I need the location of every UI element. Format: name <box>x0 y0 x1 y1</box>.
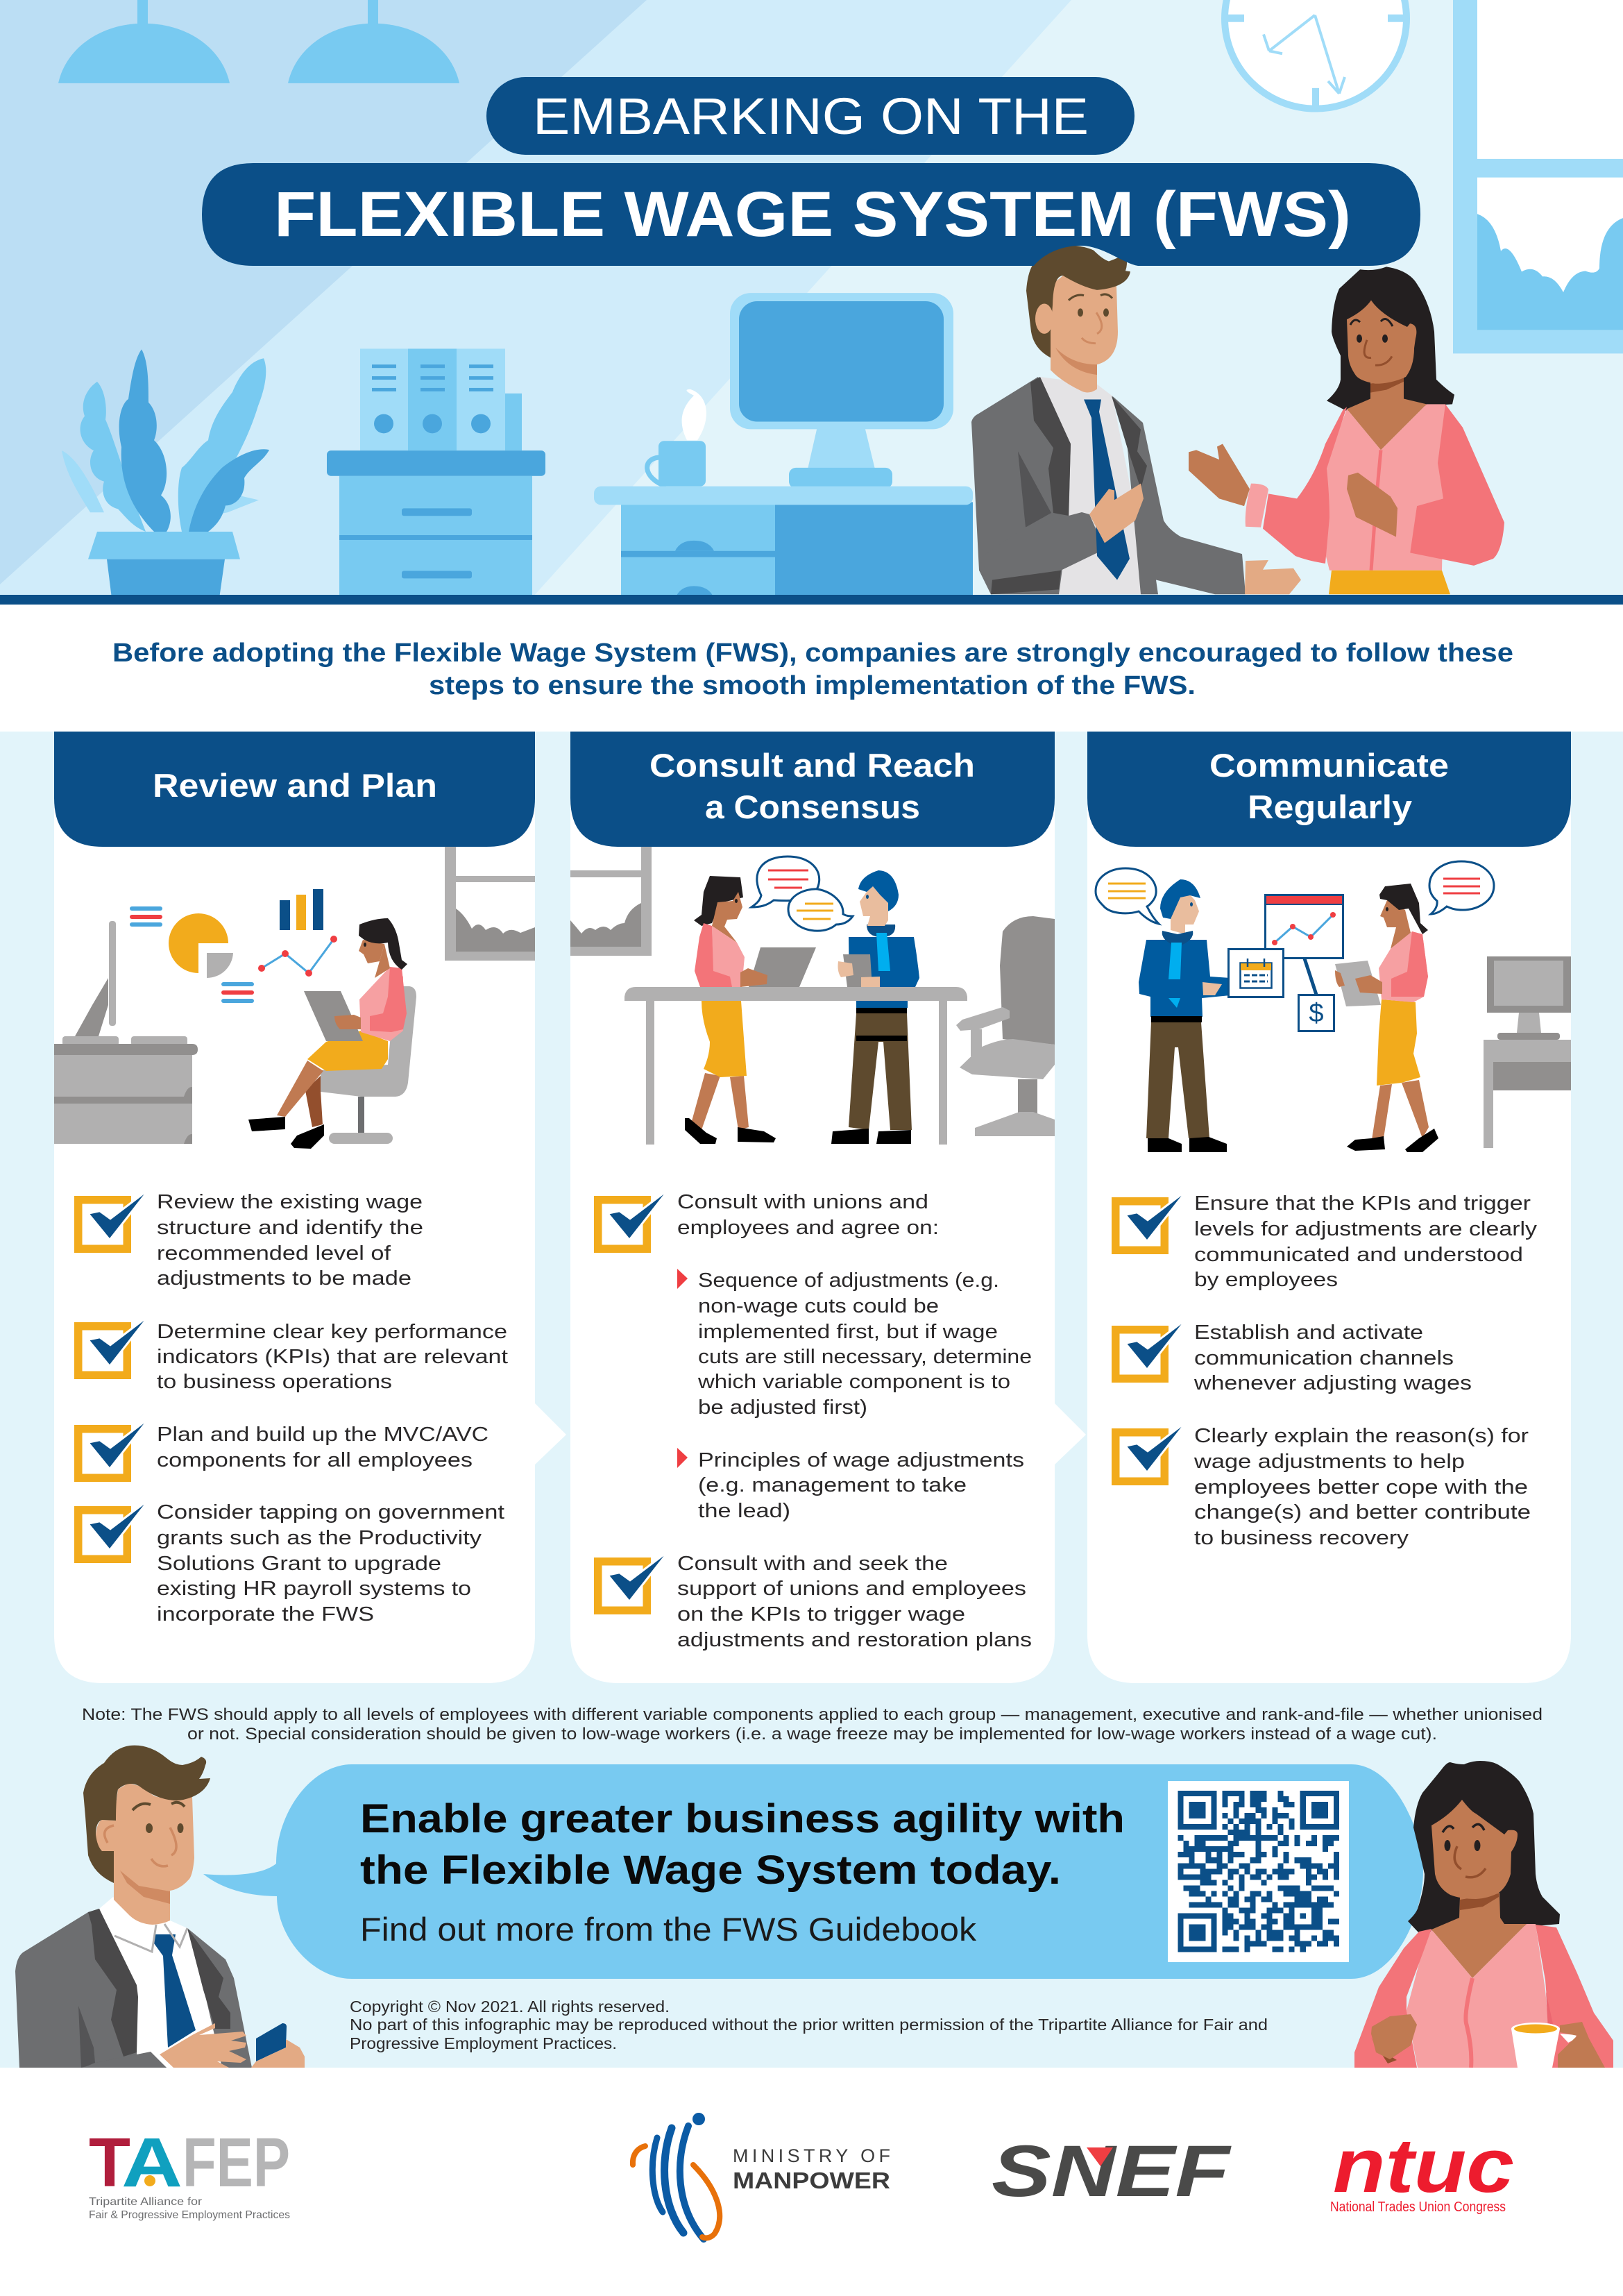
blouse <box>1354 1924 1613 2068</box>
checklist item <box>74 1501 504 1626</box>
jacket <box>15 1909 252 2068</box>
title: flexible wage system <box>202 163 1420 266</box>
checklist item: communication channels <box>1194 1347 1454 1369</box>
panel header: a Consensus <box>705 788 920 825</box>
data icons <box>130 889 337 1003</box>
man with tablet <box>831 870 919 1144</box>
blouse <box>1246 404 1504 571</box>
hands <box>1089 484 1301 594</box>
office chair <box>956 916 1055 1136</box>
tie <box>154 1934 196 2048</box>
woman with tablet <box>1335 884 1438 1152</box>
checklist item: Plan and build up the MVC/AVC <box>157 1424 488 1446</box>
note text: or not. Special consideration should be given to low-wage workers (i.e. a wage freeze may be implemented for low-wage workers instead of a wage cut). <box>187 1725 1437 1744</box>
intro text <box>112 639 1513 700</box>
speech bubbles <box>1096 861 1494 924</box>
logo: SNEF: SNEF <box>992 2131 1232 2212</box>
logo: Ministry of Manpower <box>633 2113 890 2239</box>
call to action text <box>360 1796 1125 1948</box>
checklist item: grants such as the Productivity <box>157 1527 482 1549</box>
logo: TAFEP: A <box>121 2124 182 2202</box>
call to action speech bubble <box>203 1764 1423 1979</box>
logo: Ministry of Manpower: MANPOWER <box>733 2168 890 2193</box>
checklist item: Clearly explain the reason(s) for <box>1194 1425 1529 1447</box>
sleeve and hand <box>83 2052 167 2068</box>
sub-point: sequence of adjustments: implemented first, but if wage <box>698 1321 998 1343</box>
sub-point: principles of wage adjustments: the lead) <box>698 1500 790 1522</box>
title: embarking on the <box>486 77 1135 155</box>
face <box>1431 1800 1518 1899</box>
speech bubble lines <box>768 870 833 919</box>
checklist item <box>1112 1425 1531 1549</box>
sub-point: principles of wage adjustments <box>677 1448 1024 1522</box>
checklist item: employees better cope with the <box>1194 1476 1528 1499</box>
checklist item <box>74 1191 423 1290</box>
seated woman <box>248 918 416 1149</box>
speech bubbles <box>751 856 853 931</box>
logo: NTUC: ntuc <box>1333 2123 1514 2209</box>
potted plant <box>62 349 269 598</box>
note text <box>82 1705 1543 1744</box>
ceiling lamps <box>58 0 459 83</box>
sub-point: sequence of adjustments: which variable component is to <box>697 1371 1010 1393</box>
checklist item: wage adjustments to help <box>1193 1451 1465 1473</box>
illustration: woman reviewing data <box>54 847 535 1149</box>
jacket <box>971 377 1246 594</box>
checklist item: adjustments to be made <box>157 1267 411 1290</box>
checklist item: adjustments and restoration plans <box>677 1629 1032 1651</box>
logo: Ministry of Manpower: MINISTRY OF <box>733 2145 890 2166</box>
panel header <box>570 732 1055 847</box>
hand holding phone <box>251 2039 305 2068</box>
businesswoman <box>1189 267 1504 594</box>
checklist item: levels for adjustments are clearly <box>1194 1218 1538 1240</box>
businessman <box>971 245 1301 594</box>
logo: NTUC: National Trades Union Congress <box>1330 2200 1506 2215</box>
checklist item <box>74 1321 508 1393</box>
face and neck <box>1347 301 1427 450</box>
panel header: Review and Plan <box>153 767 437 804</box>
wall clock <box>1225 0 1407 109</box>
monitor and desk <box>1484 956 1571 1148</box>
hands <box>1189 444 1397 537</box>
sub-point: sequence of adjustments: Sequence of adjustments (e.g. <box>698 1269 999 1292</box>
speech bubble lines <box>1108 879 1480 898</box>
right hand <box>1558 2022 1605 2068</box>
checklist item <box>594 1553 1032 1651</box>
checklist item: by employees <box>1194 1269 1338 1291</box>
logo: TAFEP: T <box>89 2124 130 2202</box>
call to action text: the Flexible Wage System today. <box>360 1848 1061 1893</box>
coffee mug <box>647 389 706 487</box>
logo: TAFEP: Tripartite Alliance for <box>89 2196 203 2208</box>
window <box>1453 0 1623 353</box>
checklist item: Solutions Grant to upgrade <box>157 1553 441 1575</box>
sub-point: sequence of adjustments <box>677 1269 1032 1419</box>
arrow to next panel <box>1055 1403 1086 1464</box>
checklist item: on the KPIs to trigger wage <box>677 1603 965 1626</box>
calendar card <box>1228 949 1284 997</box>
QR code <box>1168 1781 1349 1962</box>
desk <box>594 487 973 598</box>
call to action text: Enable greater business agility with <box>360 1796 1125 1841</box>
title: embarking on the: EMBARKING ON THE <box>533 87 1089 145</box>
checklist item: existing HR payroll systems to <box>157 1578 471 1600</box>
checklist item: indicators (KPIs) that are relevant <box>157 1346 508 1368</box>
checklist item: to business operations <box>157 1371 392 1393</box>
coffee cup <box>1511 2023 1577 2068</box>
binders and filing cabinet <box>327 348 545 598</box>
checklist item: support of unions and employees <box>677 1578 1026 1600</box>
checklist item <box>74 1424 488 1482</box>
panel: consult and reach a consensus <box>570 732 1086 1683</box>
window <box>445 847 535 961</box>
copyright text: Progressive Employment Practices. <box>350 2034 617 2052</box>
checklist item: Consult with unions and <box>677 1191 928 1213</box>
copyright text <box>350 1998 1268 2052</box>
checklist item: Review the existing wage <box>157 1191 423 1213</box>
window <box>570 847 652 956</box>
checklist item: Establish and activate <box>1194 1322 1423 1344</box>
checklist item <box>594 1191 939 1253</box>
standing table <box>624 987 967 1145</box>
checklist item <box>1112 1322 1472 1394</box>
checklist item: Determine clear key performance <box>157 1321 507 1343</box>
call to action text: Find out more from the FWS Guidebook <box>360 1911 977 1948</box>
logo: TAFEP: Fair & Progressive Employment Practices <box>89 2209 290 2221</box>
checklist item: components for all employees <box>157 1449 473 1471</box>
arrow to next panel <box>535 1403 566 1464</box>
tie <box>1084 399 1130 580</box>
note text: Note: The FWS should apply to all levels of employees with different variable components applied to each group — management, executive and rank-and-file — whether unionised <box>82 1705 1543 1724</box>
panel: communicate regularly <box>1087 732 1571 1683</box>
hero scene <box>0 0 1623 605</box>
sub-point: principles of wage adjustments: (e.g. management to take <box>698 1474 967 1496</box>
light section background <box>0 732 1623 2068</box>
smartphone <box>256 2023 287 2061</box>
hair <box>1327 267 1454 411</box>
neck and face <box>1026 245 1130 393</box>
illustration: consultation at table <box>570 847 1055 1145</box>
checklist item: Ensure that the KPIs and trigger <box>1194 1192 1531 1215</box>
panel header: Communicate <box>1209 747 1449 784</box>
checklist item: to business recovery <box>1194 1527 1409 1549</box>
head <box>83 1746 210 1925</box>
man with phone <box>15 1746 305 2068</box>
neck <box>1431 1893 1527 1978</box>
checklist item: recommended level of <box>157 1242 391 1265</box>
copyright text: Copyright © Nov 2021. All rights reserved. <box>350 1998 670 2016</box>
panel header <box>54 732 535 847</box>
checklist item: incorporate the FWS <box>157 1603 374 1626</box>
panel header: Regularly <box>1248 788 1412 825</box>
checklist item: Consult with and seek the <box>677 1553 948 1575</box>
logo: TAFEP: FEP <box>182 2124 290 2202</box>
kpi chart card <box>1266 895 1343 995</box>
skirt <box>1329 571 1450 594</box>
hero floor band <box>0 595 1623 605</box>
panel: review and plan <box>54 732 566 1683</box>
sub-point: sequence of adjustments: be adjusted first) <box>698 1396 867 1419</box>
checklist item: whenever adjusting wages <box>1193 1372 1472 1394</box>
sub-point: principles of wage adjustments: Principles of wage adjustments <box>698 1449 1024 1471</box>
checklist item: change(s) and better contribute <box>1194 1501 1531 1523</box>
hair <box>1408 1761 1560 1933</box>
swoosh emblem <box>633 2113 720 2239</box>
dollar card: $ <box>1309 999 1324 1028</box>
copyright text: No part of this infographic may be reproduced without the prior written permission of the Tripartite Alliance for Fair and <box>350 2016 1268 2034</box>
man gesturing <box>1139 879 1230 1152</box>
panel header: Consult and Reach <box>649 747 975 784</box>
woman with laptop <box>685 876 816 1144</box>
intro text: Before adopting the Flexible Wage System (FWS), companies are strongly encouraged to follow these <box>112 639 1513 668</box>
illustration: communicating KPIs <box>1096 861 1571 1152</box>
desk and monitor <box>54 921 198 1144</box>
intro text: steps to ensure the smooth implementation of the FWS. <box>429 671 1196 700</box>
title: flexible wage system: FLEXIBLE WAGE SYSTEM (FWS) <box>274 179 1351 250</box>
left hand <box>1371 2014 1417 2063</box>
checklist item: employees and agree on: <box>677 1217 939 1239</box>
checklist item: structure and identify the <box>157 1217 423 1239</box>
checklist item: Consider tapping on government <box>157 1501 504 1523</box>
sub-point: sequence of adjustments: non-wage cuts could be <box>698 1295 939 1317</box>
sub-point: sequence of adjustments: cuts are still necessary, determine <box>698 1346 1032 1368</box>
checklist item: communicated and understood <box>1194 1244 1523 1266</box>
panel header <box>1087 732 1571 847</box>
hero background <box>0 0 1623 597</box>
checklist item <box>1112 1192 1538 1291</box>
logo: TAFEP <box>89 2124 290 2221</box>
woman with cup <box>1354 1761 1613 2068</box>
dollar card <box>1299 995 1334 1031</box>
office furniture illustrations <box>58 0 1623 598</box>
computer monitor <box>730 293 953 489</box>
footer white strip <box>0 2068 1623 2296</box>
